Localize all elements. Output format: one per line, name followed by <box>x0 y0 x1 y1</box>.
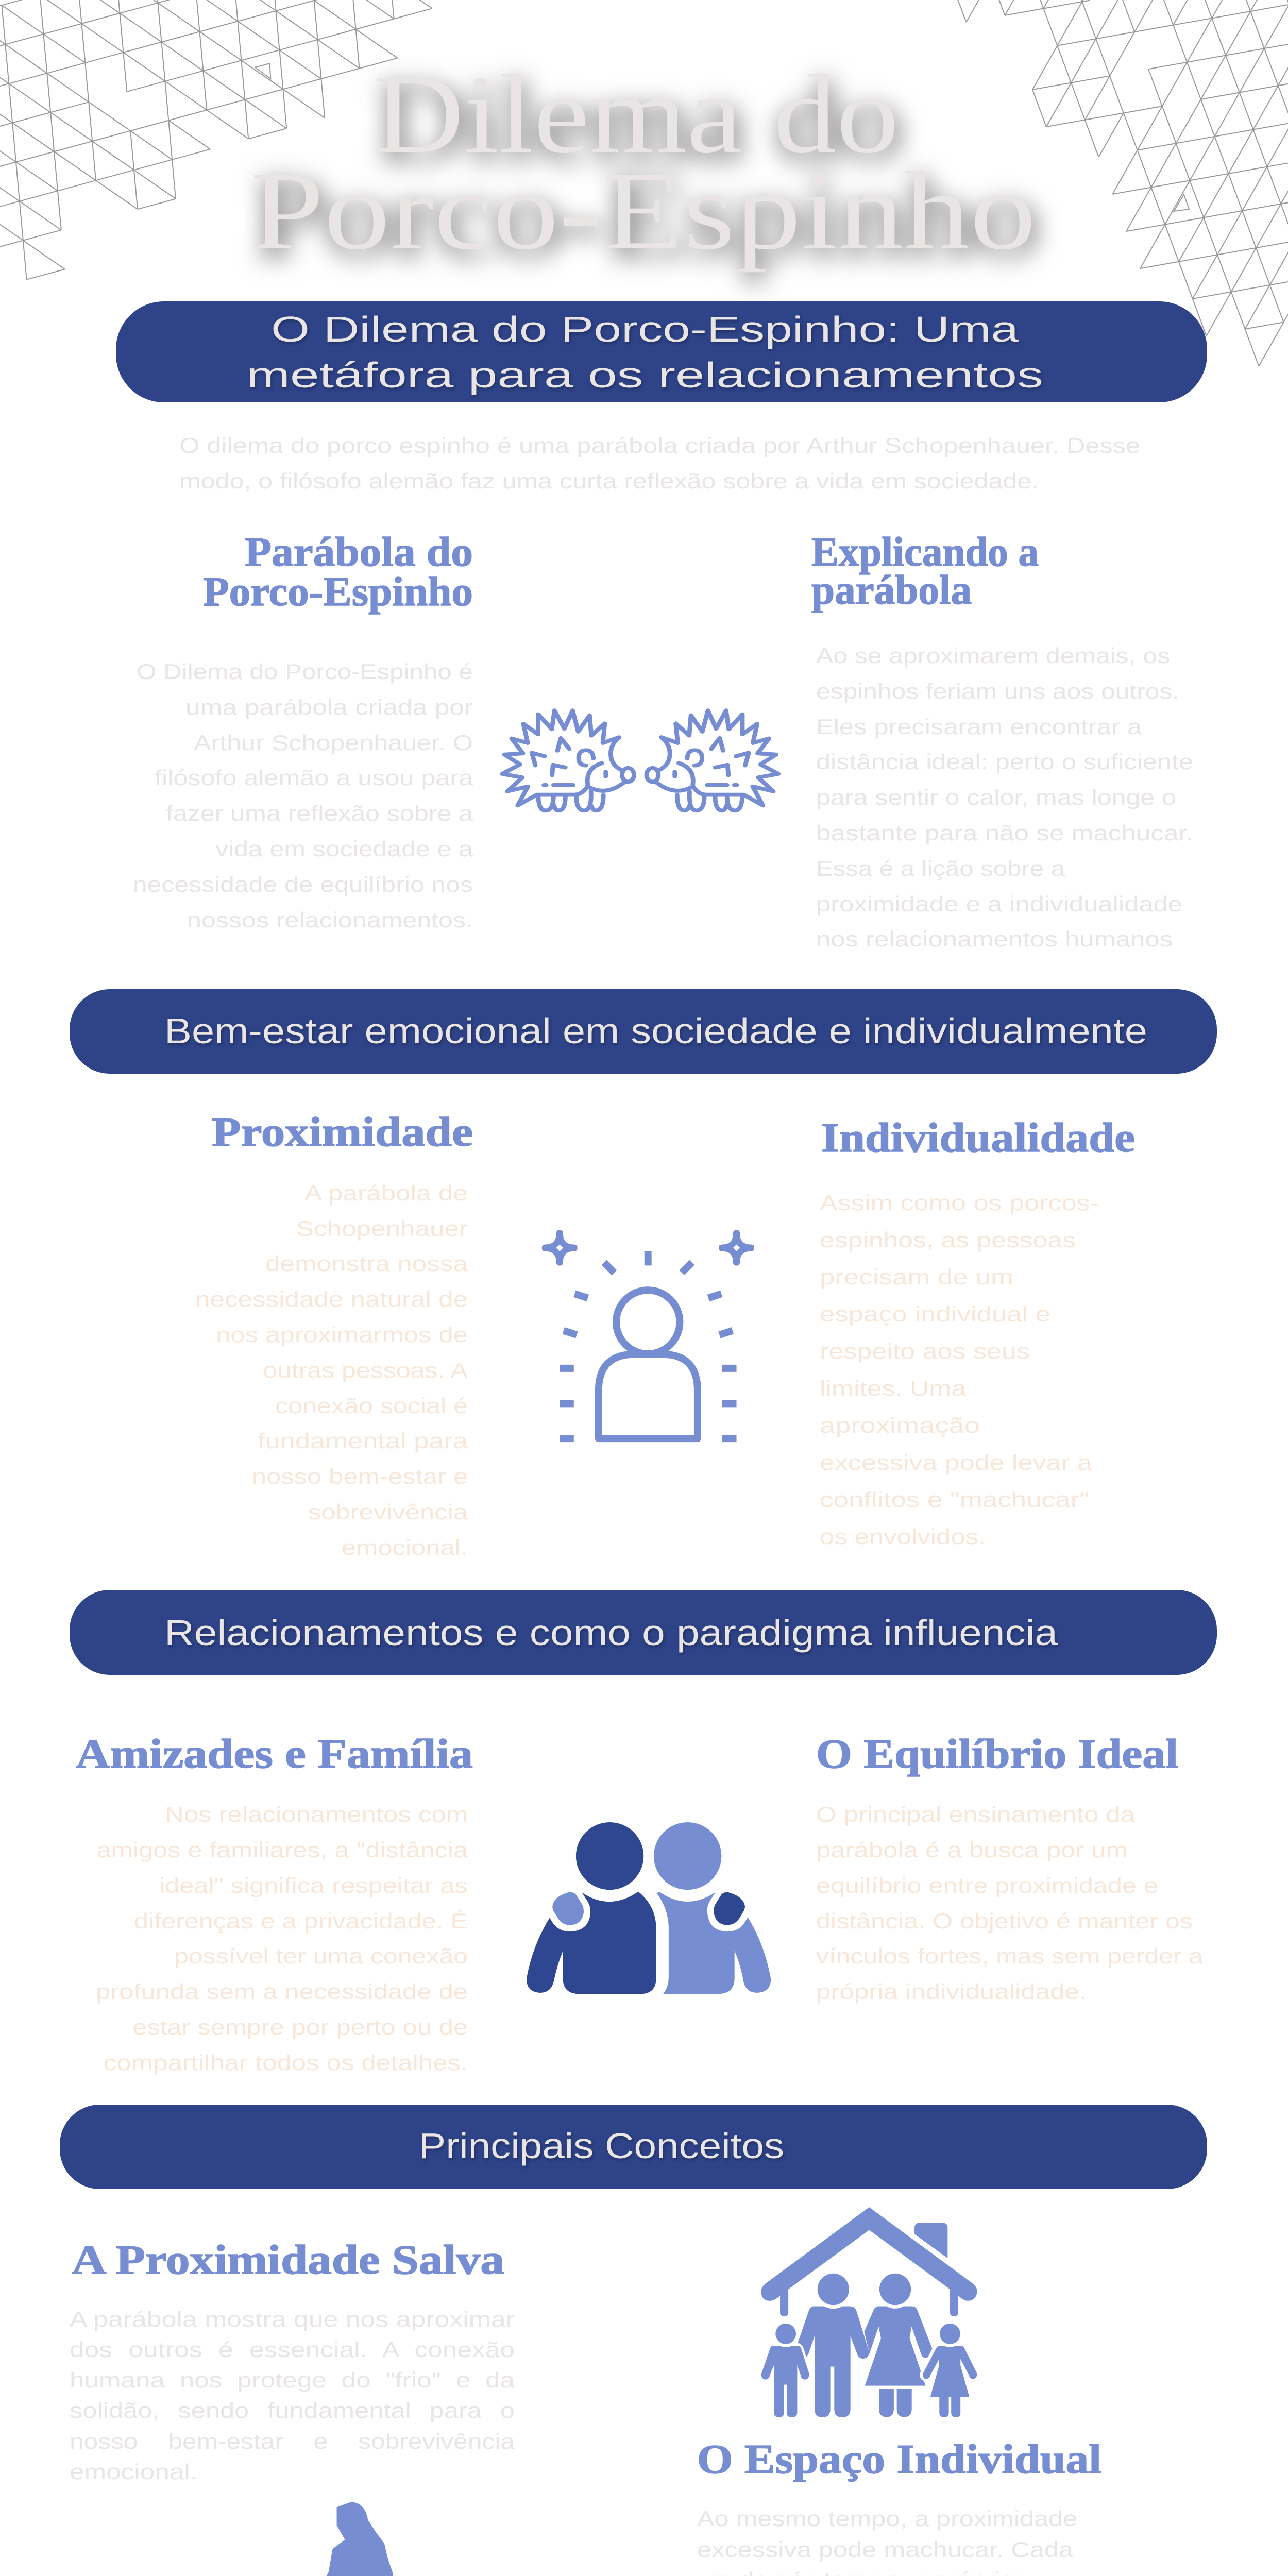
text: parable: Arthur Schopenhauer. O <box>194 731 473 755</box>
banner: metaphor: metáfora para os relacionamentos <box>246 355 1043 395</box>
text: parable: vida em sociedade e a <box>215 837 473 861</box>
text: proximity: fundamental para <box>258 1429 468 1453</box>
text: explaining the parable: nos relacionamentos humanos <box>816 927 1173 951</box>
text: individuality: os envolvidos. <box>820 1524 986 1549</box>
heading: Explicando a parábola: Explicando a <box>811 530 1039 575</box>
text: friends and family: amigos e familiares, a "distância <box>97 1838 468 1862</box>
text: ideal balance <box>816 1802 1204 2004</box>
text: proximity saves (justified): humana nos protege do "frio" e da <box>70 2368 515 2392</box>
text: parable <box>133 659 473 932</box>
text: explaining the parable: Essa é a lição sobre a <box>816 856 1065 880</box>
text: friends and family: estar sempre por perto ou de <box>132 2015 468 2039</box>
banner: bem-estar <box>70 989 1217 1074</box>
text: proximity: demonstra nossa <box>265 1251 468 1276</box>
text: friends and family: profunda sem a necessidade de <box>96 1979 468 2004</box>
icon: two friends embracing <box>527 1822 771 1994</box>
title: Dilema do <box>374 53 899 177</box>
icon: person with sparkles <box>542 1230 754 1438</box>
text: individuality: respeito aos seus <box>820 1339 1030 1363</box>
icon: family under a house roof <box>761 2207 977 2417</box>
text: ideal balance: O principal ensinamento da <box>816 1802 1136 1826</box>
text: individual space: excessiva pode machucar. Cada <box>697 2537 1074 2562</box>
title: Porco-Espinho <box>250 149 1036 273</box>
text: individual space <box>697 2506 1083 2576</box>
heading: A Proximidade Salva: A Proximidade Salva <box>72 2238 504 2283</box>
banner: bem-estar: Bem-estar emocional em sociedade e individualmente <box>164 1011 1147 1051</box>
banner: metaphor <box>116 301 1207 402</box>
heading: Parábola do Porco-Espinho: Porco-Espinho <box>203 569 473 615</box>
text: ideal balance: distância. O objetivo é manter os <box>816 1909 1193 1933</box>
text: explaining the parable: espinhos feriam uns aos outros. <box>816 679 1179 703</box>
text: individuality: excessiva pode levar a <box>820 1450 1093 1475</box>
icon: mother and child silhouette <box>261 2502 394 2576</box>
text: proximity: sobrevivência <box>308 1500 468 1524</box>
text: ideal balance: parábola é a busca por um <box>816 1838 1128 1862</box>
text: individuality <box>820 1191 1099 1549</box>
text: ideal balance: equilíbrio entre proximidade e <box>816 1873 1158 1897</box>
text: proximity saves (justified): A parábola mostra que nos aproximar <box>70 2307 515 2331</box>
heading: Individualidade: Individualidade <box>821 1115 1135 1161</box>
intro text: O dilema do porco espinho é uma parábola criada por Arthur Schopenhauer. Desse <box>179 433 1140 457</box>
heading: Explicando a parábola <box>811 530 1039 613</box>
heading: Parábola do Porco-Espinho: Parábola do <box>245 530 473 575</box>
text: proximity: nosso bem-estar e <box>252 1464 468 1488</box>
text: individuality: espaço individual e <box>820 1302 1050 1326</box>
text: proximity: necessidade natural de <box>195 1287 468 1311</box>
intro text: modo, o filósofo alemão faz uma curta reflexão sobre a vida em sociedade. <box>179 469 1039 493</box>
text: parable: nossos relacionamentos. <box>187 908 473 932</box>
heading: O Espaço Individual: O Espaço Individual <box>697 2437 1101 2482</box>
heading: Amizades e Família: Amizades e Família <box>76 1732 473 1777</box>
text: proximity: Schopenhauer <box>296 1216 468 1241</box>
intro text <box>179 433 1140 493</box>
text: friends and family: compartilhar todos os detalhes. <box>104 2050 468 2075</box>
banner: relacionamentos <box>70 1590 1217 1675</box>
text: individuality: precisam de um <box>820 1265 1013 1289</box>
decorative triangle mesh top left <box>0 0 446 290</box>
text: proximity saves (justified) <box>70 2307 515 2484</box>
text: proximity: outras pessoas. A <box>263 1358 468 1382</box>
text: explaining the parable: distância ideal: perto o suficiente <box>816 750 1193 774</box>
text: proximity saves (justified): emocional. <box>70 2460 197 2484</box>
banner: relacionamentos: Relacionamentos e como o paradigma influencia <box>164 1613 1058 1653</box>
text: explaining the parable: para sentir o calor, mas longe o <box>816 785 1176 809</box>
banner: principais conceitos: Principais Conceitos <box>419 2126 784 2166</box>
text: proximity saves (justified): solidão, sendo fundamental para o <box>70 2398 515 2422</box>
heading: Parábola do Porco-Espinho <box>203 530 473 615</box>
text: explaining the parable: proximidade e a individualidade <box>816 892 1182 916</box>
text: friends and family: diferenças e a privacidade. É <box>134 1909 468 1933</box>
text: proximity: conexão social é <box>275 1394 468 1418</box>
banner: principais conceitos <box>60 2105 1207 2189</box>
text: parable: fazer uma reflexão sobre a <box>166 801 473 825</box>
text: proximity: A parábola de <box>304 1181 468 1205</box>
text: proximity saves (justified): dos outros é essencial. A conexão <box>70 2337 515 2362</box>
text: parable: uma parábola criada por <box>185 695 473 719</box>
banner: metaphor: O Dilema do Porco-Espinho: Uma <box>271 309 1019 349</box>
heading: Explicando a parábola: parábola <box>811 568 972 613</box>
text: ideal balance: própria individualidade. <box>816 1979 1087 2004</box>
text: individual space: Ao mesmo tempo, a proximidade <box>697 2506 1077 2531</box>
text: ideal balance: vínculos fortes, mas sem perder a <box>816 1944 1204 1968</box>
text: individuality: conflitos e "machucar" <box>820 1487 1089 1512</box>
text: explaining the parable: bastante para não se machucar. <box>816 821 1193 845</box>
text: friends and family: ideal" significa respeitar as <box>159 1873 468 1897</box>
text: explaining the parable <box>816 643 1193 951</box>
text: friends and family: possível ter uma conexão <box>174 1944 468 1968</box>
text: explaining the parable: Ao se aproximarem demais, os <box>816 643 1170 668</box>
text: proximity saves (justified): nosso bem-estar e sobrevivência <box>70 2429 515 2453</box>
text: proximity: nos aproximarmos de <box>216 1323 468 1347</box>
text: friends and family <box>96 1802 468 2075</box>
text: parable: necessidade de equilíbrio nos <box>133 872 473 896</box>
decorative triangle mesh top right <box>953 0 1288 394</box>
text: individuality: aproximação <box>820 1413 980 1437</box>
text: explaining the parable: Eles precisaram encontrar a <box>816 715 1142 739</box>
heading: O Equilíbrio Ideal: O Equilíbrio Ideal <box>816 1732 1178 1777</box>
text: parable: O Dilema do Porco-Espinho é <box>137 659 473 684</box>
text: parable: filósofo alemão a usou para <box>155 766 473 790</box>
icon: two hedgehogs <box>502 710 778 810</box>
text: individuality: limites. Uma <box>820 1376 967 1400</box>
heading: Proximidade: Proximidade <box>212 1110 473 1155</box>
text: proximity: emocional. <box>342 1535 468 1560</box>
text: individuality: espinhos, as pessoas <box>820 1228 1076 1252</box>
text: individuality: Assim como os porcos- <box>820 1191 1099 1215</box>
text: proximity <box>195 1181 468 1560</box>
text: friends and family: Nos relacionamentos com <box>165 1802 468 1826</box>
title <box>250 53 1036 273</box>
